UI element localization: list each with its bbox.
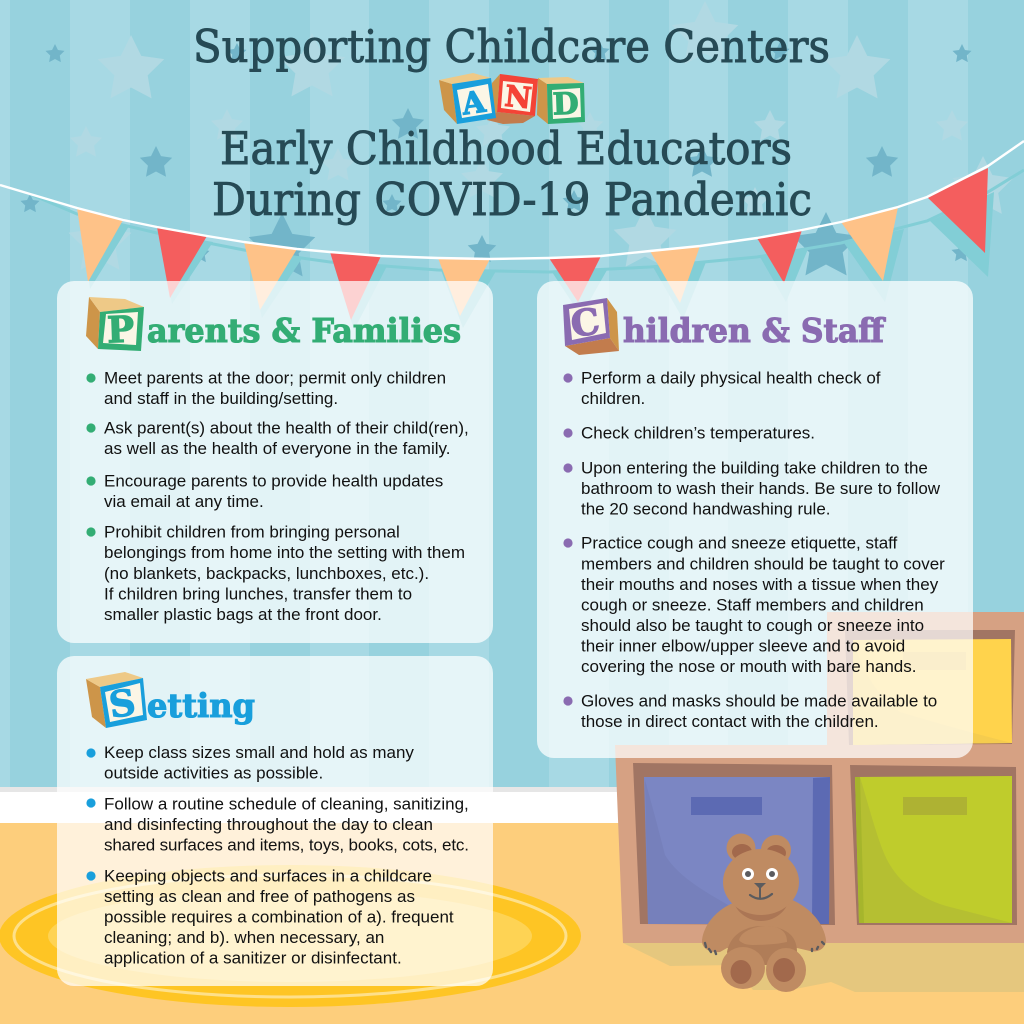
bullets: (no blankets, backpacks, lunchboxes, etc.).: [104, 564, 429, 583]
bullets: application of a sanitizer or disinfectant.: [104, 948, 402, 968]
bullets: covering the nose or mouth with bare hands.: [581, 657, 916, 676]
striped wall background: [0, 0, 1024, 790]
title: During COVID-19 Pandemic: [212, 173, 812, 226]
baseboard and floor: [0, 787, 1024, 1024]
bunting string: [0, 141, 1024, 259]
block: N: [487, 74, 538, 124]
block: D: [537, 77, 585, 124]
bullets: children.: [581, 389, 645, 408]
floor shadow of shelf: [623, 943, 1024, 992]
bullets: their inner elbow/upper sleeve and to avoid: [581, 636, 905, 656]
bullets: setting as clean and free of pathogens as: [104, 887, 415, 906]
teddy bear: [702, 834, 826, 992]
bullets: cough or sneeze. Staff members and children: [581, 596, 924, 614]
bullets: those in direct contact with the children.: [581, 712, 879, 731]
bear arms and body: [702, 899, 826, 965]
bear legs: [721, 947, 806, 992]
block: D: D: [552, 87, 579, 122]
bullets: Encourage parents to provide health updates: [104, 472, 443, 490]
icon: C block: C: [568, 300, 602, 346]
bullets: Meet parents at the door; permit only children: [104, 368, 446, 388]
bullets: Gloves and masks should be made available to: [581, 692, 937, 710]
AND alphabet blocks: [439, 73, 585, 124]
bear head: [723, 849, 799, 921]
wall stars: [20, 1, 1013, 276]
icon: P block: [86, 297, 144, 351]
bear claws: [705, 942, 824, 954]
icon: S block: [86, 672, 147, 728]
bullets: the 20 second handwashing rule.: [581, 500, 831, 518]
icon: S block: S: [107, 682, 138, 727]
bullets: via email at any time.: [104, 492, 264, 511]
block: N: N: [503, 79, 533, 115]
heading: etting: [147, 686, 255, 725]
title: [193, 20, 830, 226]
bullets: Practice cough and sneeze etiquette, staff: [581, 534, 898, 552]
toy shelf: [615, 612, 1024, 943]
bullets: Keeping objects and surfaces in a childcare: [104, 866, 432, 886]
bullets: smaller plastic bags at the front door.: [104, 605, 382, 624]
bullets: and disinfecting throughout the day to clean: [104, 815, 433, 834]
panel: setting: [57, 656, 493, 986]
bullets: possible requires a combination of a). frequent: [104, 908, 454, 926]
yellow rug: [0, 865, 581, 1007]
bullets: [86, 743, 469, 968]
title: Supporting Childcare Centers: [193, 20, 830, 73]
icon: C block: [563, 298, 619, 355]
heading: arents & Families: [147, 311, 461, 350]
bullets: as well as the health of everyone in the family.: [104, 439, 450, 458]
bullets: Perform a daily physical health check of: [581, 368, 881, 388]
title: Early Childhood Educators: [220, 122, 792, 175]
icon: P block: P: [106, 309, 135, 351]
bullets: should also be taught to cough or sneeze into: [581, 616, 924, 635]
panel: parents and families: [57, 281, 493, 643]
bunting shadow: [30, 170, 1024, 330]
bullets: bathroom to wash their hands. Be sure to follow: [581, 479, 941, 498]
bear ears: [726, 834, 791, 865]
bullets: Prohibit children from bringing personal: [104, 522, 400, 542]
bullets: and staff in the building/setting.: [104, 389, 338, 408]
cubby: blue bin: [633, 763, 835, 925]
bullets: [86, 368, 469, 624]
cubby: top right yellow bin: [845, 630, 1015, 745]
bullets: cleaning; and b). when necessary, an: [104, 928, 384, 947]
heading: hildren & Staff: [623, 311, 886, 350]
bunting flags: [77, 168, 988, 320]
block: A: A: [459, 85, 488, 123]
bullets: Ask parent(s) about the health of their child(ren),: [104, 418, 469, 438]
cubby: green bin: [850, 765, 1017, 925]
bullets: members and children should be taught to cover: [581, 554, 945, 574]
bullets: Follow a routine schedule of cleaning, sanitizing,: [104, 794, 469, 814]
bullets: belongings from home into the setting with them: [104, 543, 465, 562]
bullets: Check children’s temperatures.: [581, 424, 815, 442]
bullets: [563, 368, 945, 731]
bullets: shared surfaces and items, toys, books, cots, etc.: [104, 836, 469, 854]
block: A: [439, 73, 496, 124]
bullets: their mouths and noses with a tissue when they: [581, 575, 939, 594]
bullets: If children bring lunches, transfer them to: [104, 584, 412, 604]
bullets: Keep class sizes small and hold as many: [104, 743, 414, 762]
panel: children and staff: [537, 281, 973, 758]
bullets: Upon entering the building take children to the: [581, 458, 928, 478]
bullets: outside activities as possible.: [104, 764, 323, 782]
